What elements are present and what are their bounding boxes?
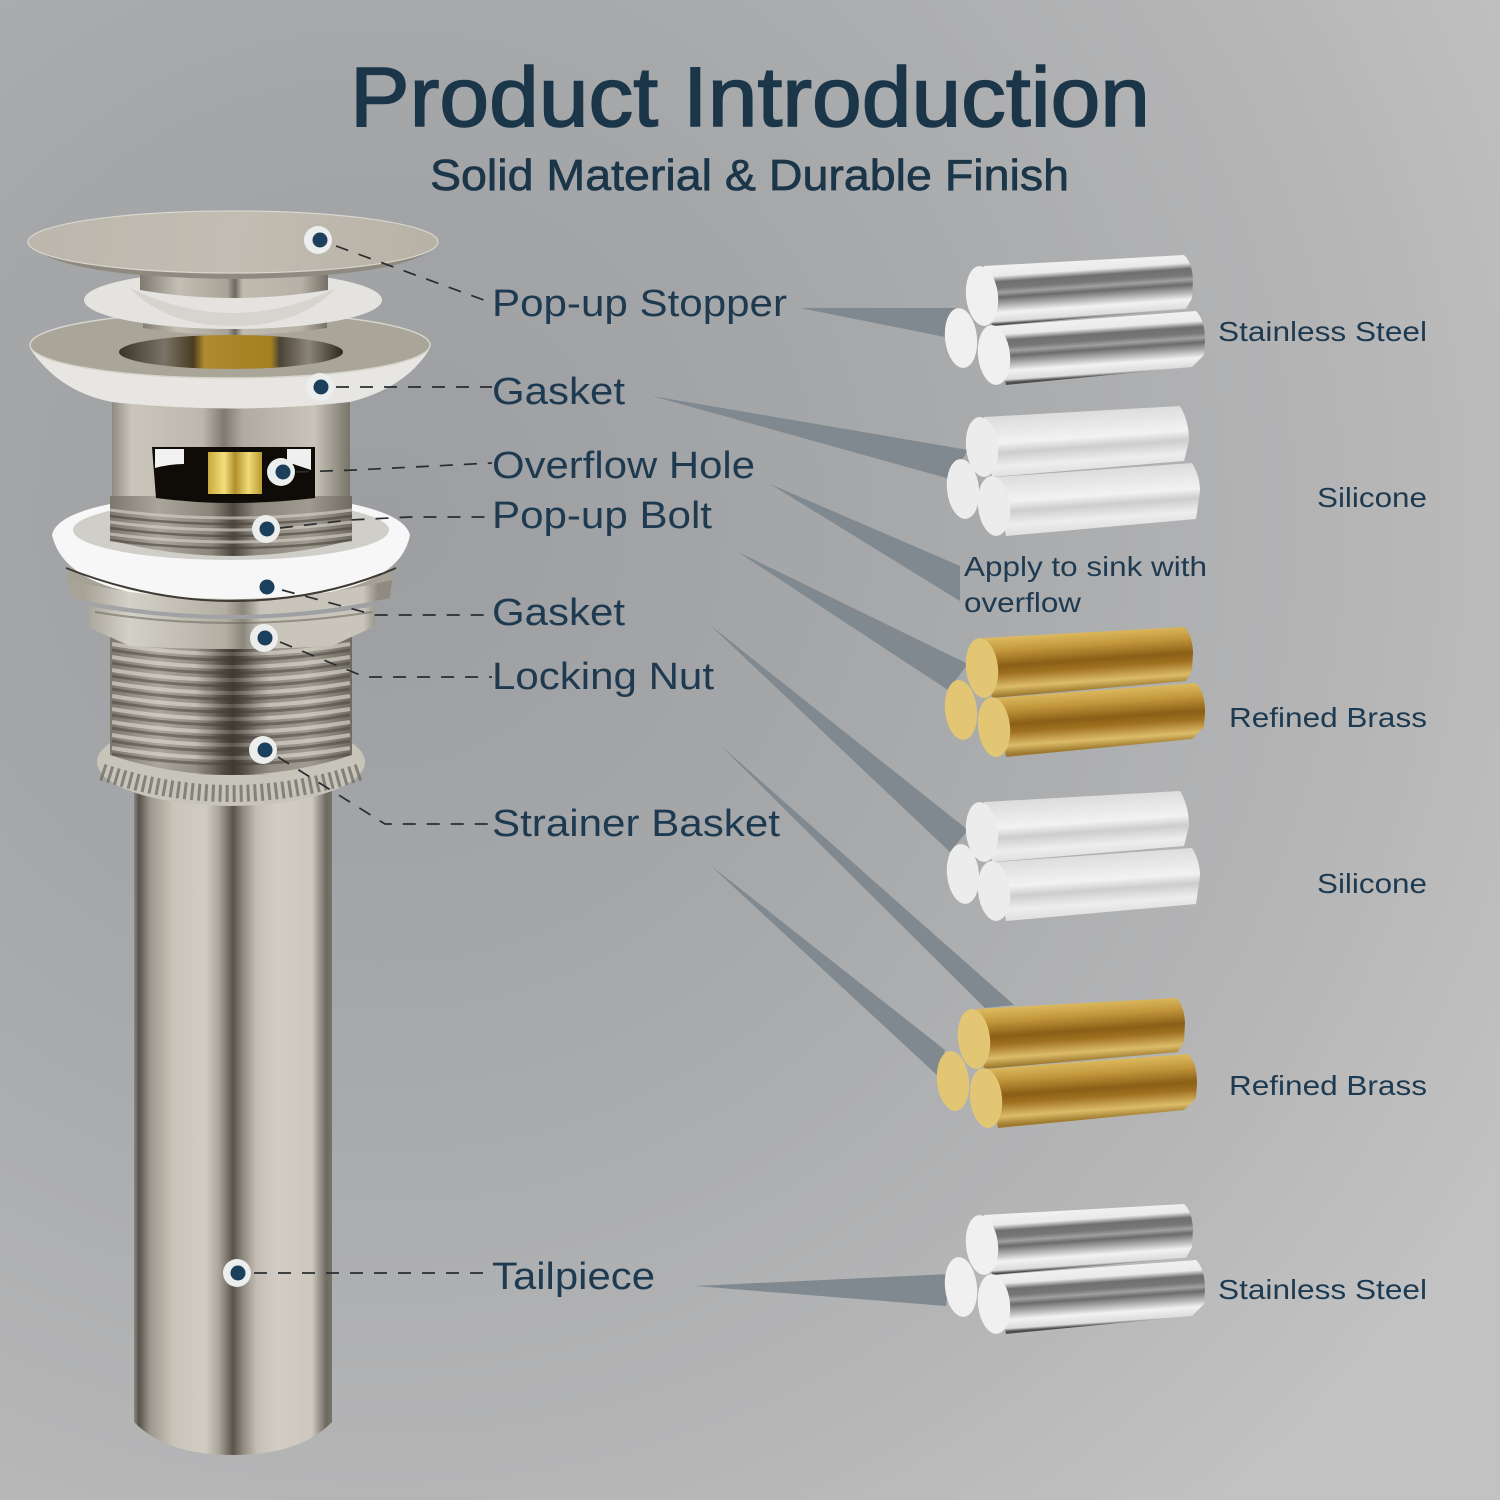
subtitle: Solid Material & Durable Finish [430, 151, 1069, 200]
material labels: Apply to sink with [964, 551, 1207, 582]
material labels: Stainless Steel [1218, 1274, 1427, 1305]
material swatch: brass rods 2 [934, 998, 1197, 1130]
white gasket [52, 500, 410, 601]
material swatch: stainless steel rods [942, 255, 1205, 387]
part labels: Strainer Basket [492, 803, 780, 845]
part labels: Pop-up Bolt [492, 495, 712, 537]
material swatch: silicone rods [944, 406, 1200, 538]
part labels [492, 283, 787, 1298]
material labels: Refined Brass [1229, 1070, 1427, 1101]
stopper stem [140, 268, 328, 298]
material swatch: stainless steel rods 2 [942, 1204, 1205, 1336]
part labels: Gasket [492, 592, 625, 634]
flange and white gasket of pop-up [30, 312, 430, 408]
material labels: Silicone [1317, 482, 1427, 513]
callout markers [223, 226, 334, 1287]
pointer wedges [652, 308, 1014, 1306]
middle white gasket disc [84, 271, 382, 329]
part labels: Gasket [492, 371, 625, 413]
drain assembly illustration [28, 211, 438, 1455]
material labels: Refined Brass [1229, 702, 1427, 733]
lower body [112, 395, 350, 505]
part labels: Overflow Hole [492, 445, 755, 487]
knurled ring [97, 718, 365, 806]
part labels: Locking Nut [492, 656, 714, 698]
tailpiece pipe [134, 790, 332, 1455]
title: Product Introduction [350, 50, 1150, 144]
part labels: Tailpiece [492, 1256, 655, 1298]
collar under white disc [143, 318, 327, 335]
part labels: Pop-up Stopper [492, 283, 787, 325]
pop-up cap [28, 211, 438, 279]
material labels [964, 316, 1427, 1305]
material labels: Stainless Steel [1218, 316, 1427, 347]
leader lines [254, 246, 492, 1273]
upper thread section [110, 496, 352, 556]
strainer thread section [110, 635, 352, 775]
material labels: overflow [964, 587, 1082, 618]
material swatch: brass rods [942, 627, 1205, 759]
locking nut [67, 565, 393, 649]
material swatch: silicone rods 2 [944, 791, 1200, 923]
material labels: Silicone [1317, 868, 1427, 899]
overflow window [152, 447, 315, 503]
